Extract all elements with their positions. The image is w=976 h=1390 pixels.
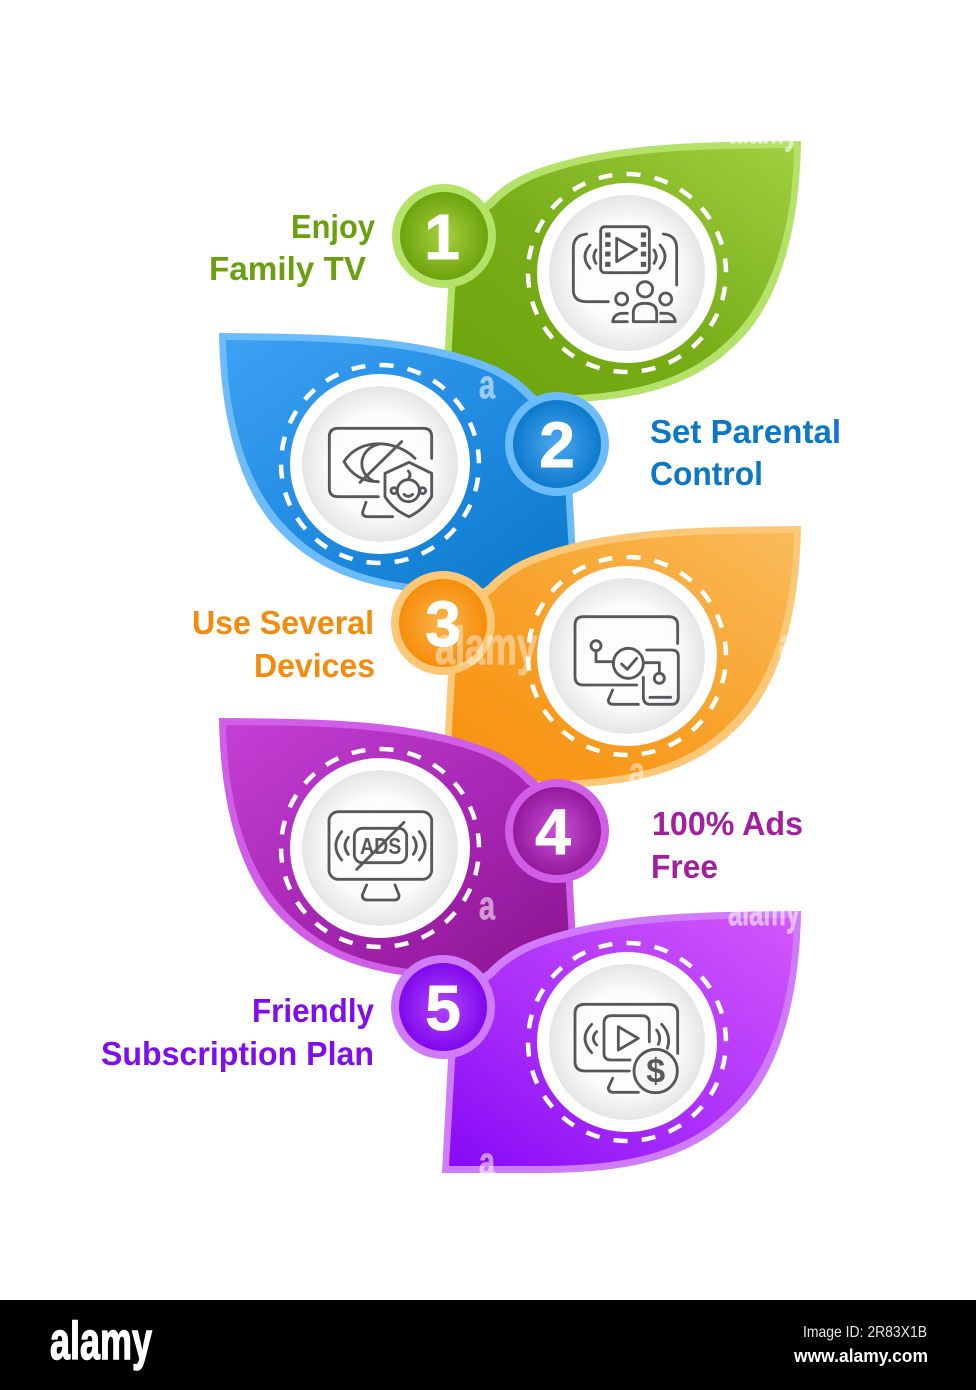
label: Set Parental Control: Set Parental <box>650 413 841 450</box>
label: 100% Ads Free: Free <box>651 848 718 885</box>
leaf shape 5: a <box>479 1140 496 1184</box>
label: Enjoy Family TV: Family TV <box>209 250 366 287</box>
white disc with dashed ring 1 <box>514 160 740 386</box>
number badge 3 <box>391 571 495 675</box>
image id: Image ID: 2R83X1B <box>803 1324 927 1341</box>
leaf shape 4: a <box>479 884 496 928</box>
label: Friendly Subscription Plan: Friendly <box>252 992 375 1029</box>
number badge 5 <box>391 955 495 1059</box>
number badge 2 <box>505 392 609 496</box>
white disc with dashed ring 4 <box>267 735 493 961</box>
watermark over step 3: alamy <box>435 617 537 676</box>
number badge 4: 4 <box>535 796 571 868</box>
label: 100% Ads Free: 100% Ads <box>652 805 803 842</box>
number badge 3: 3 <box>425 588 461 660</box>
icon: film screen and family <box>573 227 677 322</box>
footer logo: alamy <box>50 1312 152 1371</box>
number badge 1 <box>392 184 496 288</box>
icon: ads blocked on monitor <box>329 812 432 900</box>
panel: step 3 orange leaf <box>391 526 801 794</box>
panel: step 2 blue leaf <box>219 333 609 595</box>
panel: step 5 purple leaf <box>391 890 801 1184</box>
website: www.alamy.com <box>793 1346 928 1366</box>
leaf shape 2 <box>219 333 578 595</box>
leaf shape 5: alamy <box>728 890 800 934</box>
white disc with dashed ring 3 <box>514 543 740 769</box>
icon: ads blocked on monitor: ADS <box>360 833 401 859</box>
icon: video plan with dollar: $ <box>646 1053 665 1091</box>
number badge 2: 2 <box>539 409 575 481</box>
leaf shape 5 <box>442 890 801 1184</box>
panel: step 4 magenta leaf <box>219 718 609 980</box>
label: Set Parental Control: Control <box>650 455 763 492</box>
icon: connected devices <box>575 617 678 704</box>
label: Friendly Subscription Plan: Subscription Plan <box>101 1035 374 1072</box>
label: Enjoy Family TV: Enjoy <box>291 208 376 245</box>
leaf shape 1 <box>442 108 801 403</box>
number badge 4 <box>505 779 609 883</box>
leaf shape 3: a <box>779 622 796 666</box>
label: Use Several Devices: Use Several <box>192 604 374 641</box>
number badge 1: 1 <box>424 201 460 273</box>
leaf shape 3: a <box>629 750 646 794</box>
leaf shape 3 <box>442 526 801 794</box>
label: Use Several Devices: Devices <box>254 647 375 684</box>
white disc with dashed ring 5 <box>514 929 740 1155</box>
icon: video plan with dollar <box>575 1004 678 1093</box>
icon: crossed eye and baby shield <box>329 428 432 517</box>
panel: step 1 green leaf <box>392 108 801 403</box>
number badge 5: 5 <box>425 972 461 1044</box>
leaf shape 1: alamy <box>728 108 798 152</box>
footer bar <box>0 1300 976 1390</box>
leaf shape 2: a <box>479 363 496 407</box>
leaf shape 4 <box>219 718 578 980</box>
white disc with dashed ring 2 <box>267 351 493 577</box>
